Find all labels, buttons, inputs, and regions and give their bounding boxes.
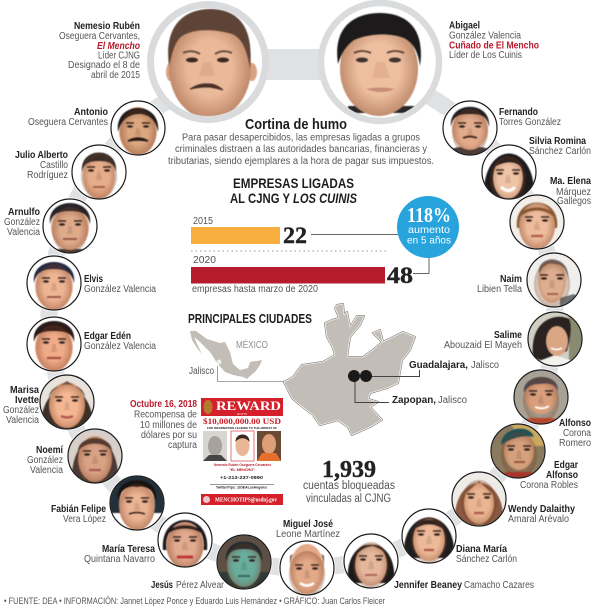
heading: Cortina de humo: Cortina de humo (245, 116, 347, 133)
label: Nemesio Rubén: Designado el 8 de (68, 60, 140, 71)
person: Maria Teresa: Quintana Navarro (84, 554, 155, 565)
person: Alfonso: Romero (559, 438, 591, 449)
label: Abigael: Abigael (449, 20, 480, 32)
person: Edgar Alfonso: Edgar (554, 460, 578, 471)
callout: 118% increase: en 5 años (407, 234, 451, 246)
label: Abigael: Líder de Los Cuinis (449, 50, 522, 61)
label: Abigael: Cuñado de El Mencho (449, 40, 539, 52)
intro text: tributarias, siendo ejemplares a la hora de pagar sus impuestos. (168, 156, 434, 167)
person: Jennifer Beaney (342, 532, 534, 591)
person: Antonio (28, 100, 166, 156)
label: Nemesio Rubén: abril de 2015 (91, 70, 140, 81)
person: Ma. Elena (508, 176, 591, 250)
person: Fernando: Fernando (499, 107, 538, 118)
statistic: blocked accounts: 1,939 (322, 457, 376, 483)
person: Naim (477, 252, 582, 310)
map: México (189, 331, 285, 382)
person: Fernando: Torres González (499, 117, 561, 128)
person: Diana María (400, 508, 517, 565)
person: Maria Teresa (84, 512, 214, 569)
map: Jalisco (284, 304, 420, 435)
bar chart: companies: 48 (387, 263, 413, 288)
city label: Zapopan (392, 395, 467, 406)
person: Jesús: Jesús (151, 580, 173, 591)
person: Fernando (442, 100, 561, 156)
person: Wendy Dalaithy: Amaral Arévalo (508, 514, 569, 525)
person: Alfonso (511, 368, 591, 449)
person: Antonio: Antonio (74, 107, 108, 118)
city label: Guadalajara (409, 360, 499, 371)
person: Edgar Edén: Edgar Edén (84, 331, 131, 342)
person: Noemí: González (27, 455, 63, 466)
connecting ring (49, 49, 555, 568)
reward poster (201, 398, 283, 505)
person: Salime: Salime (494, 330, 522, 341)
intro text (168, 132, 434, 167)
person: Julio Alberto: Rodríguez (27, 170, 68, 181)
person: Marisa Ivette: González (3, 405, 39, 416)
reward text: Octubre 16, 2018 (130, 398, 197, 410)
footer credits: • FUENTE: DEA • INFORMACIÓN: Jannet López Ponce y Eduardo Luis Hernández • GRÁFICO: Juan Carlos Fleicer (4, 596, 385, 607)
reward poster: Nemesio Rubén Oseguera Cervantes (214, 463, 271, 467)
label: Abigael (449, 20, 539, 61)
person: Alfonso: Alfonso (559, 418, 591, 429)
reward poster: REWARD (216, 398, 281, 413)
person: Edgar Alfonso: Corona Robles (520, 480, 578, 491)
callout: 118% increase (397, 196, 459, 258)
person: Salime (444, 310, 584, 369)
portrait: Nemesio Rubén (150, 4, 266, 135)
reward poster: MENCHOTIPS@usdoj.gov (215, 498, 277, 504)
heading: empresas ligadas: EMPRESAS LIGADAS (233, 175, 354, 191)
person: Naim: Libien Tella (477, 284, 522, 295)
reward text (130, 398, 197, 451)
person: Fabián Felipe: Fabián Felipe (51, 504, 106, 515)
person: Edgar Edén: González Valencia (84, 341, 156, 352)
person: Miguel José: Leone Martínez (276, 529, 340, 540)
reward text: dólares por su (141, 430, 197, 441)
person: Wendy Dalaithy (450, 470, 575, 528)
person: Ma. Elena: Márquez (556, 187, 591, 198)
label: Nemesio Rubén: El Mencho (97, 41, 140, 52)
person: Arnulfo: Arnulfo (8, 207, 40, 218)
person: Alfonso: Corona (563, 428, 591, 439)
person: Silvia Romina (480, 136, 591, 202)
label: Nemesio Rubén (59, 21, 140, 81)
city label: Guadalajara: Jalisco (471, 360, 499, 371)
reward text: captura (168, 440, 197, 451)
portrait: Abigael (321, 3, 439, 121)
person: Julio Alberto (15, 144, 128, 200)
person: Fabián Felipe: Vera López (63, 514, 106, 525)
person: Miguel José: Miguel José (283, 519, 333, 530)
person: Julio Alberto: Julio Alberto (15, 150, 68, 161)
label: Abigael: González Valencia (449, 30, 521, 42)
reward poster: Twitter/Tips: @DEALosAngeles (216, 486, 267, 490)
label: Nemesio Rubén: Oseguera Cervantes, (59, 31, 140, 42)
heading: empresas ligadas: LOS CUINIS (293, 190, 358, 206)
reward poster: OF UP TO (237, 412, 247, 416)
statistic: blocked accounts (303, 457, 395, 505)
person: Noemí: Valencia (30, 465, 63, 476)
statistic: blocked accounts: cuentas bloqueadas (303, 480, 395, 492)
bar chart: companies: 22 (283, 223, 307, 248)
intro text: Para pasar desapercibidos, las empresas ligadas a grupos (182, 132, 420, 144)
label: Nemesio Rubén: Nemesio Rubén (74, 21, 140, 32)
person: Arnulfo: González (4, 217, 40, 228)
person: Miguel José (276, 520, 340, 596)
person: Edgar Edén (26, 316, 156, 372)
person: Silvia Romina: Sánchez Carlón (529, 146, 591, 157)
person: Silvia Romina: Silvia Romina (529, 136, 586, 147)
reward poster: “EL MENCHO” (229, 467, 255, 472)
bar chart: companies: empresas hasta marzo de 2020 (192, 284, 318, 295)
person: Arnulfo (4, 198, 98, 254)
person: Elvis: Elvis (84, 274, 103, 285)
reward poster: +1-213-237-0990 (220, 475, 264, 480)
person: Ma. Elena: Ma. Elena (550, 176, 591, 187)
callout: 118% increase: aumento (408, 224, 450, 236)
person: Marisa Ivette: Marisa (10, 385, 39, 396)
map: México: Jalisco (189, 366, 214, 377)
reward text: 10 millones de (140, 420, 197, 431)
label: Nemesio Rubén: Líder CJNG (98, 50, 140, 62)
bar chart: companies: 2020 (193, 255, 216, 266)
person: Maria Teresa: María Teresa (102, 544, 155, 555)
person: Jennifer Beaney: Camacho Cazares (464, 580, 534, 591)
bar chart: companies (191, 216, 429, 295)
person: Edgar Alfonso: Alfonso (546, 470, 578, 481)
person: Wendy Dalaithy: Wendy Dalaithy (508, 504, 575, 515)
city label: Zapopan: Zapopan, (392, 395, 436, 406)
person: Marisa Ivette: Ivette (15, 395, 39, 406)
person: Noemí (27, 428, 124, 484)
person: Julio Alberto: Castillo (40, 160, 68, 171)
person: Antonio: Oseguera Cervantes (28, 117, 108, 128)
map: México: MÉXICO (236, 338, 268, 351)
reward poster: FOR INFORMATION LEADING TO THE ARREST OF (207, 426, 277, 430)
reward text: Recompensa de (134, 410, 197, 420)
person: Ma. Elena: Gallegos (557, 196, 591, 207)
person: Arnulfo: Valencia (7, 227, 40, 238)
person: Naim: Naim (500, 274, 522, 285)
city label: Zapopan: Jalisco (438, 395, 467, 406)
person: Elvis (26, 254, 156, 312)
reward poster: $10,000,000.00 USD (203, 417, 281, 426)
heading: empresas ligadas (230, 175, 358, 206)
person: Fabián Felipe (51, 474, 166, 532)
person: Elvis: González Valencia (84, 284, 156, 295)
heading: principales ciudades: PRINCIPALES CIUDADES (188, 312, 312, 326)
heading: empresas ligadas: AL CJNG Y (230, 190, 291, 206)
person: Noemí: Noemí (36, 445, 64, 456)
bar chart: companies: 2015 (193, 216, 213, 227)
intro text: criminales distraen a las autoridades bancarias, financieras y (175, 144, 427, 155)
statistic: blocked accounts: vinculadas al CJNG (306, 493, 391, 505)
person: Diana María: Sánchez Carlón (456, 554, 517, 565)
person: Jesús (151, 534, 272, 592)
person: Marisa Ivette: Valencia (6, 415, 39, 426)
city label: Guadalajara: Guadalajara, (409, 360, 468, 371)
person: Salime: Abouzaid El Mayeh (444, 340, 522, 351)
callout: 118% increase: 118% (407, 203, 451, 227)
person: Jennifer Beaney: Jennifer Beaney (394, 580, 462, 591)
person: Jesús: Pérez Alvear (176, 580, 225, 591)
person: Marisa Ivette (3, 374, 96, 430)
person: Edgar Alfonso (488, 422, 578, 491)
person: Diana María: Diana María (456, 544, 507, 555)
